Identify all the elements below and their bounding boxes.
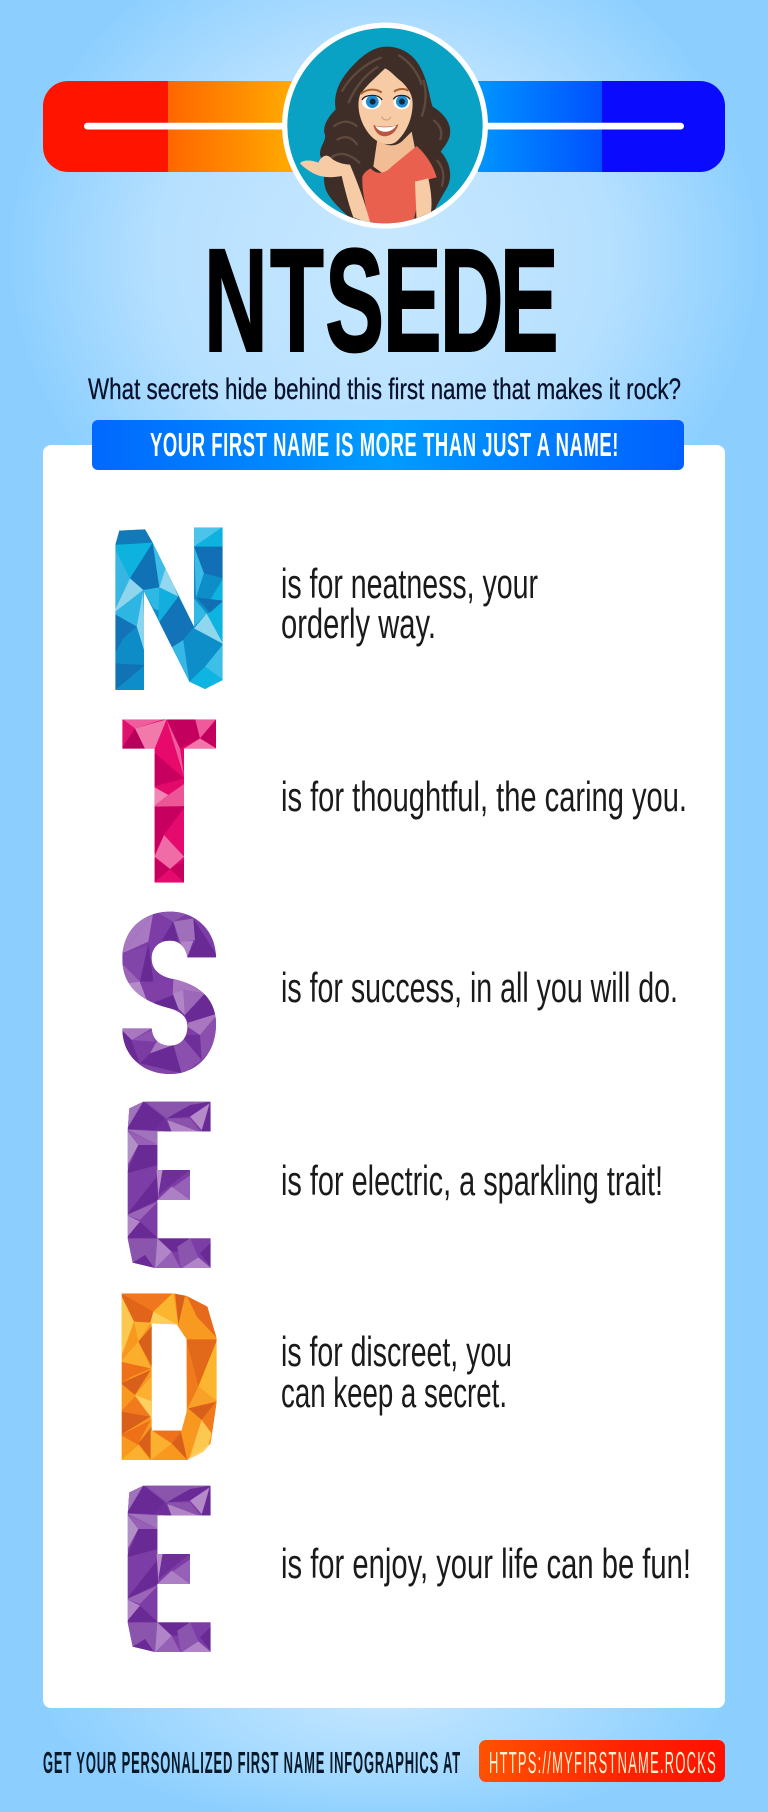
letter E <box>125 1100 213 1270</box>
letter S <box>120 910 220 1078</box>
text: N meaning: orderly way. <box>281 600 436 647</box>
text: N meaning: is for neatness, your <box>281 560 538 607</box>
letter D <box>120 1292 218 1462</box>
header bar <box>43 81 725 172</box>
letter T <box>120 717 220 885</box>
text: D meaning <box>281 1328 512 1416</box>
footer url button <box>479 1740 725 1782</box>
text: D meaning: can keep a secret. <box>281 1369 507 1416</box>
text: N meaning <box>281 560 538 647</box>
title: NTSEDE <box>204 218 559 383</box>
letter N <box>115 527 223 690</box>
portrait avatar <box>282 23 488 229</box>
letter E <box>125 1484 213 1654</box>
text: D meaning: is for discreet, you <box>281 1328 512 1375</box>
content panel <box>43 445 725 1708</box>
banner <box>92 420 684 470</box>
